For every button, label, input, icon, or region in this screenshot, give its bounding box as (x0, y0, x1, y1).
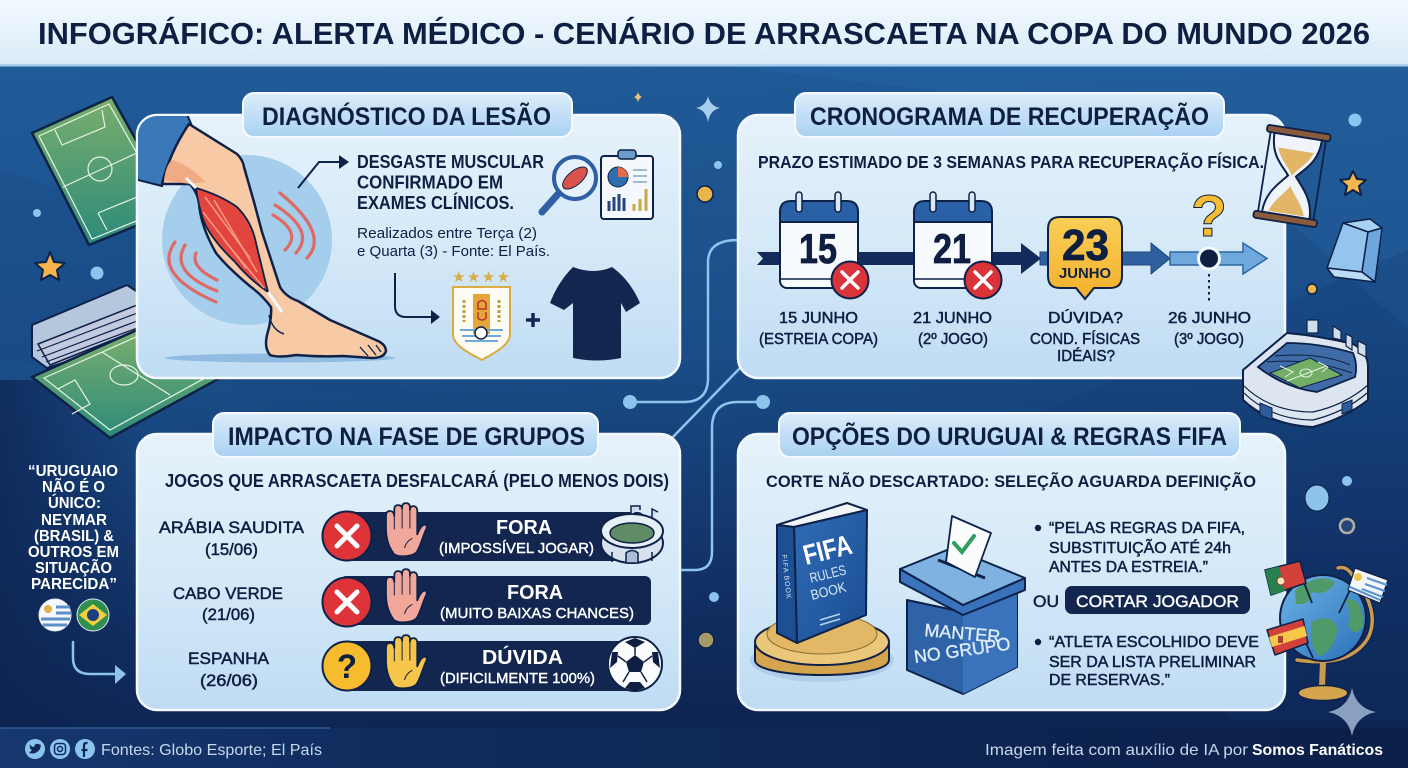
side note: neymar quote (28, 463, 126, 684)
icon: question mark and milestone dot (1191, 184, 1227, 302)
icons: social media (25, 739, 95, 759)
row: espanha: (DIFICILMENTE 100%) (440, 670, 595, 687)
text: cut not ruled out: CORTE NÃO DESCARTADO: SELEÇÃO AGUARDA DEFINIÇÃO (766, 471, 1256, 491)
row: cabo verde: CABO VERDE (173, 584, 283, 603)
arrow: to impact panel (73, 642, 126, 684)
text: fifa rule bullet two: SER DA LISTA PRELIMINAR (1049, 654, 1256, 671)
timeline labels: (2º JOGO) (918, 331, 988, 348)
arrow: to diagnosis (298, 155, 349, 188)
text: fifa rule bullet two: DE RESERVAS.” (1049, 672, 1170, 689)
panel: diagnóstico da lesão (130, 93, 680, 378)
text: fifa rule bullet one: SUBSTITUIÇÃO ATÉ 24h (1049, 537, 1231, 557)
icon: navy shirt (550, 267, 640, 360)
icon: fifa rules book: FIFA (800, 529, 855, 571)
row: espanha: DÚVIDA (482, 645, 563, 669)
row: cabo verde: (21/06) (202, 605, 255, 624)
connector lines between panels (623, 240, 770, 570)
icon: yellow tag 23 junho: JUNHO (1059, 265, 1111, 282)
icon: calendar 21: 21 (933, 225, 971, 272)
icon: yellow tag 23 junho: 23 (1062, 221, 1109, 270)
timeline labels: 21 JUNHO (913, 310, 992, 327)
icon: calendar 21 (914, 192, 1002, 298)
icon: clipboard report (601, 150, 653, 219)
timeline labels (759, 308, 1251, 365)
text: credits: Imagem feita com auxílio de IA por (985, 742, 1249, 759)
row: espanha: ? (337, 648, 357, 686)
icon: calendar 15: 15 (799, 225, 837, 272)
decor: large sparkle (1328, 688, 1376, 736)
text: diagnosis headline (357, 152, 544, 213)
footer (0, 728, 1408, 768)
text: exam dates: e Quarta (3) - Fonte: El País. (357, 243, 550, 260)
text: diagnosis headline: EXAMES CLÍNICOS. (357, 192, 514, 213)
icon: fifa rules book: FIFA BOOK (780, 554, 792, 599)
title: INFOGRÁFICO: ALERTA MÉDICO - CENÁRIO DE ARRASCAETA NA COPA DO MUNDO 2026 (38, 16, 1370, 51)
text: credits (985, 742, 1383, 759)
decor: left pitch bottom (32, 330, 220, 438)
text: exam dates (357, 225, 550, 260)
side note: neymar quote: NÃO É O (42, 478, 105, 496)
side note: neymar quote: PARECIDA” (31, 576, 117, 593)
decor: dots and sparkles (33, 92, 1362, 648)
timeline labels: COND. FÍSICAS (1030, 329, 1140, 348)
icon: fifa rules book: BOOK (809, 579, 848, 603)
row: arábia saudita (159, 503, 663, 563)
icon: yellow tag 23 junho (1048, 217, 1122, 299)
text: credits: Somos Fanáticos (1252, 742, 1383, 759)
option: cut player (1033, 586, 1250, 614)
title bar (0, 0, 1408, 66)
flag: portugal (1265, 561, 1312, 603)
decor: bleachers (32, 285, 150, 368)
row: arábia saudita: (15/06) (205, 540, 258, 559)
heading pill: OPÇÕES DO URUGUAI & REGRAS FIFA (792, 421, 1227, 451)
text: diagnosis headline: DESGASTE MUSCULAR (357, 152, 544, 172)
option: cut player: CORTAR JOGADOR (1076, 592, 1239, 611)
icon: ballot box: NO GRUPO (913, 634, 1012, 667)
row: cabo verde: (MUITO BAIXAS CHANCES) (440, 605, 634, 622)
icon: uruguay crest (452, 269, 510, 360)
text: exam dates: Realizados entre Terça (2) (357, 225, 537, 242)
timeline labels: (3º JOGO) (1174, 331, 1244, 348)
heading pill (213, 413, 598, 457)
decor: gold star left (35, 252, 65, 280)
row: cabo verde (173, 569, 651, 626)
timeline labels: 15 JUNHO (779, 310, 858, 327)
panel: opções do uruguai e regras fifa (738, 413, 1285, 710)
text: fifa rule bullet one (1035, 520, 1245, 576)
text: diagnosis headline: CONFIRMADO EM (357, 172, 503, 192)
decor: crystal block (1327, 219, 1382, 282)
decor: left pitch top (32, 97, 175, 245)
side note: neymar quote: “URUGUAIO (28, 463, 118, 480)
text: fifa rule bullet two (1035, 634, 1259, 689)
icon: fifa rules book: RULES (808, 561, 848, 586)
flag: spain (1267, 619, 1313, 658)
icon: ballot box: MANTER (924, 620, 1001, 647)
side note: neymar quote: ÚNICO: (48, 494, 101, 512)
panel: impacto na fase de grupos (137, 413, 680, 710)
panel: cronograma de recuperação (738, 93, 1285, 378)
icon: brazil flag badge (77, 599, 109, 631)
icon: magnifier (542, 157, 596, 212)
row: arábia saudita: (IMPOSSÍVEL JOGAR) (439, 540, 594, 557)
heading pill (779, 413, 1240, 457)
side note: neymar quote: (BRASIL) & (34, 528, 114, 545)
icon: uruguay crest: ★★★★ (452, 269, 510, 286)
row: arábia saudita: ARÁBIA SAUDITA (159, 518, 305, 537)
option: cut player: OU (1033, 592, 1059, 611)
row: arábia saudita: FORA (496, 517, 552, 539)
row: espanha (188, 635, 662, 691)
icon: calendar 15 (780, 192, 868, 298)
side note: neymar quote: SITUAÇÃO (35, 559, 112, 577)
icon: fifa rules book (777, 503, 867, 643)
timeline labels: DÚVIDA? (1048, 308, 1123, 327)
icon: stadium (1243, 320, 1368, 427)
heading pill (243, 93, 572, 137)
icon: ballot box (900, 516, 1025, 694)
text: fifa rule bullet one: “PELAS REGRAS DA FIFA, (1049, 520, 1245, 537)
arrow: to crest and shirt (395, 273, 440, 324)
row: espanha: ESPANHA (188, 649, 270, 668)
icon: uruguay flag badge (39, 599, 71, 631)
plus sign (526, 313, 540, 327)
heading pill (795, 93, 1224, 137)
text: fifa rule bullet two: “ATLETA ESCOLHIDO DEVE (1049, 634, 1259, 651)
row: cabo verde: FORA (507, 582, 563, 604)
icon: globe with flags (1265, 561, 1388, 700)
text: fifa rule bullet one: ANTES DA ESTREIA.” (1049, 559, 1208, 576)
text: matches missed: JOGOS QUE ARRASCAETA DESFALCARÁ (PELO MENOS DOIS) (165, 470, 669, 491)
side note: neymar quote: NEYMAR (41, 512, 107, 529)
heading pill: DIAGNÓSTICO DA LESÃO (262, 101, 551, 131)
side note: neymar quote: OUTROS EM (28, 544, 119, 561)
text: sources: Fontes: Globo Esporte; El País (101, 742, 322, 759)
flag: uruguay (1339, 568, 1388, 613)
row: espanha: (26/06) (200, 671, 258, 690)
timeline labels: (ESTREIA COPA) (759, 331, 878, 348)
heading pill: CRONOGRAMA DE RECUPERAÇÃO (810, 101, 1209, 131)
icon: golden pedestal (750, 614, 894, 682)
icon: ballot paper (946, 516, 991, 577)
icon: hourglass (1253, 125, 1331, 227)
timeline arrow (757, 243, 1267, 274)
timeline labels: 26 JUNHO (1168, 310, 1251, 327)
icon: soccer ball (608, 637, 662, 691)
text: recovery estimate: PRAZO ESTIMADO DE 3 SEMANAS PARA RECUPERAÇÃO FÍSICA. (758, 151, 1264, 172)
icon: leg with muscle injury (130, 112, 395, 362)
decor: gold star right (1340, 171, 1366, 195)
icon: mini stadium (601, 506, 663, 563)
timeline labels: IDÉAIS? (1057, 346, 1115, 365)
heading pill: IMPACTO NA FASE DE GRUPOS (228, 423, 585, 451)
icon: question mark and milestone dot: ? (1191, 184, 1227, 249)
